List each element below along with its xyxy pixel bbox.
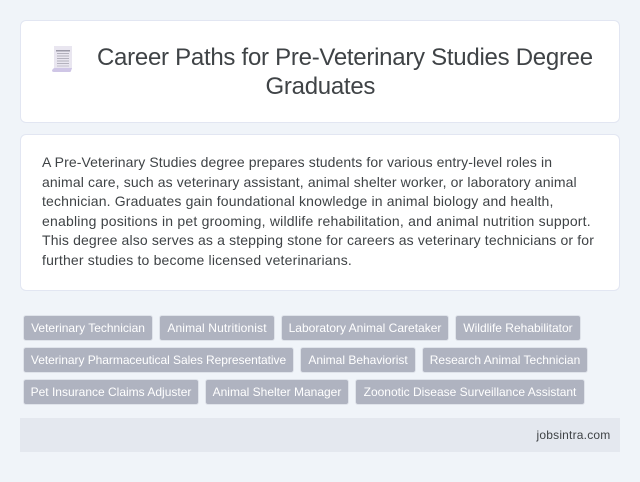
tag [159, 315, 275, 341]
tag [205, 379, 349, 405]
tag [422, 347, 588, 373]
tag list [23, 315, 588, 405]
tag: Pet Insurance Claims Adjuster [31, 385, 191, 399]
tag: Animal Shelter Manager [213, 385, 341, 399]
tag [455, 315, 581, 341]
icon: document scroll [52, 46, 72, 72]
tag: Laboratory Animal Caretaker [289, 321, 441, 335]
tag: Research Animal Technician [430, 353, 580, 367]
description text [42, 154, 594, 268]
tag: Veterinary Technician [31, 321, 145, 335]
tag: Veterinary Pharmaceutical Sales Representative [31, 353, 286, 367]
description text: further studies to become licensed veterinarians. [42, 252, 352, 268]
panel: description card [20, 134, 620, 291]
tag [300, 347, 416, 373]
title: Career Paths for Pre-Veterinary Studies Degree [97, 44, 593, 71]
footer source text: jobsintra.com [536, 428, 610, 442]
tag [355, 379, 585, 405]
tag: Animal Nutritionist [167, 321, 267, 335]
description text: enabling positions in pet grooming, wildlife rehabilitation, and animal nutrition support. [42, 213, 591, 229]
tag [23, 347, 294, 373]
tag: Animal Behaviorist [308, 353, 408, 367]
panel: header card [20, 20, 620, 123]
title second line: Graduates [266, 73, 375, 100]
tag: Wildlife Rehabilitator [463, 321, 573, 335]
footer bar [20, 418, 620, 452]
tag [23, 315, 153, 341]
description text: technician. Graduates gain foundational knowledge in animal biology and health, [42, 193, 554, 209]
description text: A Pre-Veterinary Studies degree prepares students for various entry-level roles in [42, 154, 552, 170]
description text: animal care, such as veterinary assistant, animal shelter worker, or laboratory animal [42, 174, 577, 190]
description text: This degree also serves as a stepping stone for careers as veterinary technicians or for [42, 232, 594, 248]
tag [281, 315, 449, 341]
tag: Zoonotic Disease Surveillance Assistant [364, 385, 576, 399]
tag [23, 379, 199, 405]
